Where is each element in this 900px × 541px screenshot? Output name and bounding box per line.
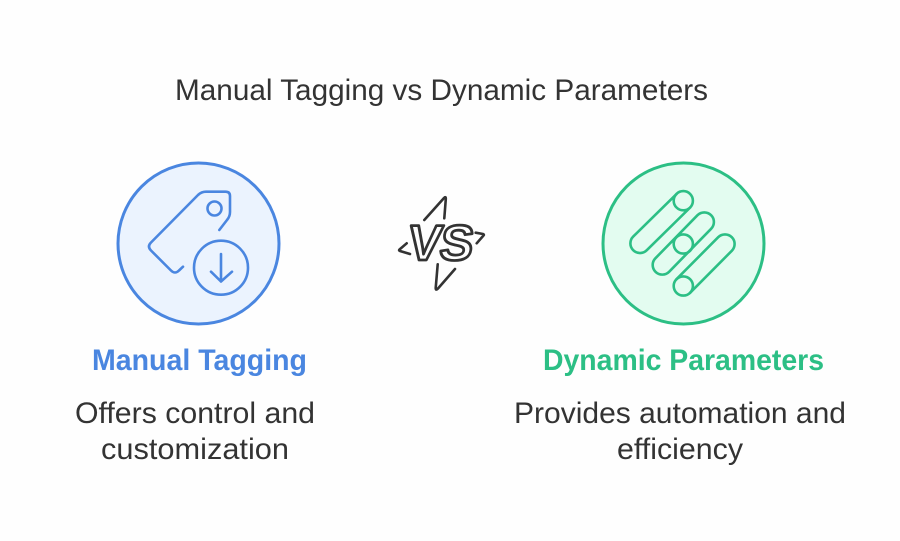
- heading: manual tagging: Manual Tagging: [92, 344, 307, 377]
- text: manual tagging description: Offers control and: [75, 397, 315, 430]
- icon: tag with download arrow: [118, 163, 279, 324]
- versus letters: V: [404, 215, 446, 271]
- panel: dynamic parameters: [514, 163, 846, 466]
- text: manual tagging description: [75, 397, 315, 466]
- heading: dynamic parameters: Dynamic Parameters: [543, 344, 824, 377]
- versus bolts: [399, 197, 484, 290]
- icon: capsules: [603, 163, 764, 324]
- text: dynamic parameters description: efficiency: [617, 433, 743, 466]
- text: dynamic parameters description: Provides automation and: [514, 397, 846, 430]
- text: manual tagging description: customization: [101, 433, 289, 466]
- icon: versus: [399, 197, 484, 290]
- title: Manual Tagging vs Dynamic Parameters: [175, 74, 708, 107]
- text: dynamic parameters description: [514, 397, 846, 466]
- panel: manual tagging: [75, 163, 315, 466]
- versus letters: S: [436, 215, 478, 271]
